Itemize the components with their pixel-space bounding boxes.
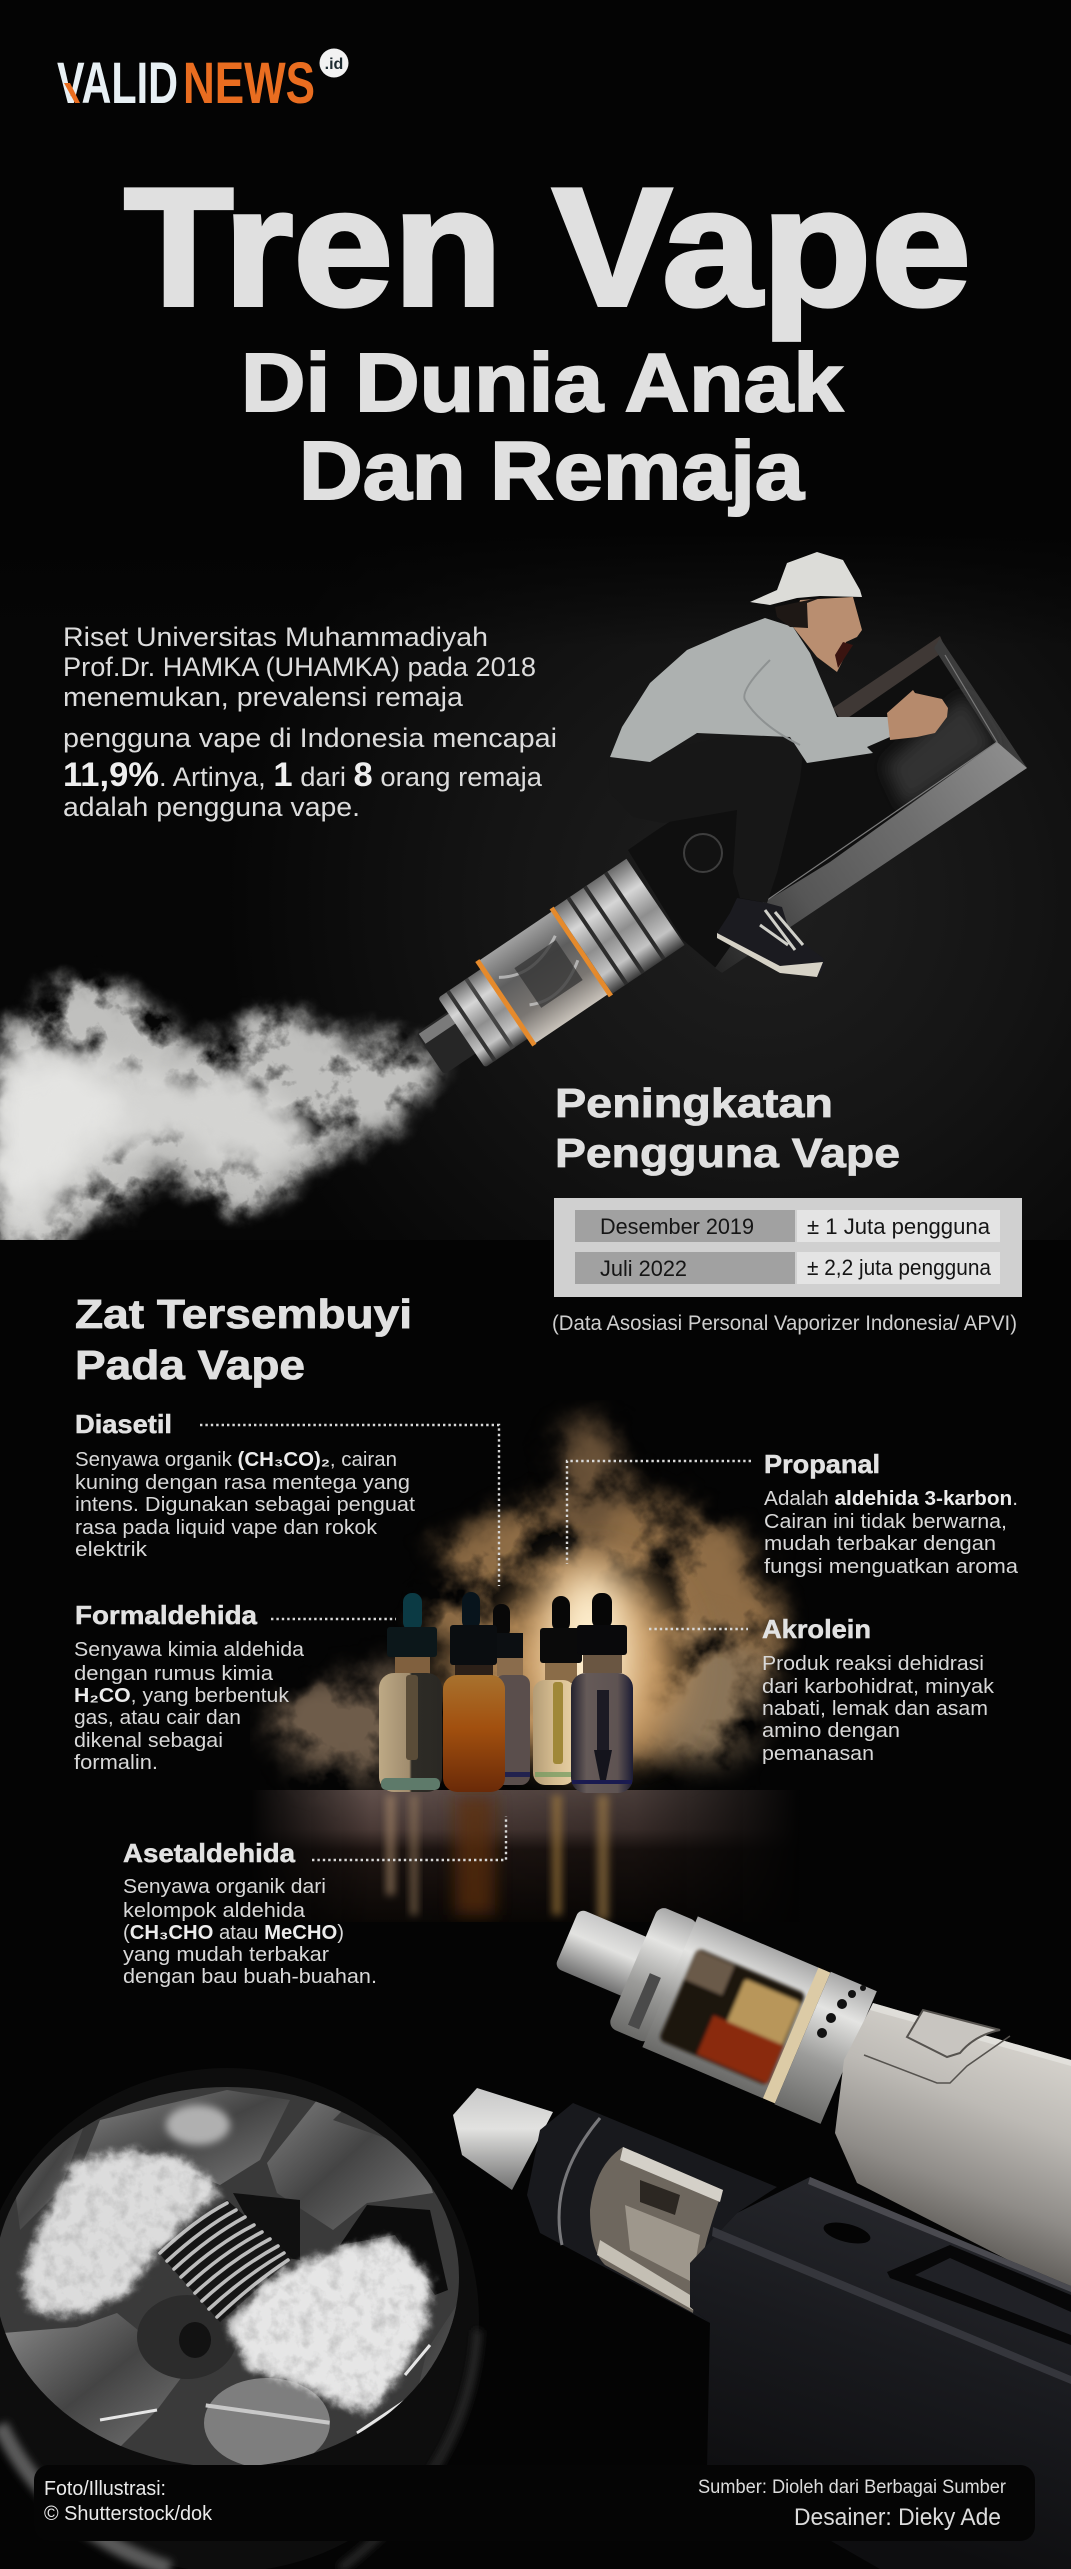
base button [684,834,722,872]
callout: Diasetil: rasa pada liquid vape dan rokok [75,1516,378,1539]
panel outline [760,655,997,905]
mod highlight band [712,2227,1071,2384]
section heading: zat tersembuyi: Zat Tersembuyi [75,1291,412,1337]
silver tank assembly [539,1872,877,2124]
pants [608,737,803,903]
logo id badge [320,48,348,78]
callout: Asetaldehida: (CH₃CHO atau MeCHO) [123,1921,344,1944]
photo: silver vape [539,1872,1071,2292]
black mod body [690,2177,1071,2569]
callout: Formaldehida [74,1600,396,1774]
glow and smoke [270,1430,775,1785]
outer ring [0,2068,479,2569]
source and designer: Sumber: Dioleh dari Berbagai Sumber [698,2477,1007,2498]
photo: black vape [453,2088,1071,2569]
deck [0,2087,459,2467]
photo: rider background glow [0,530,1071,1240]
callout: Asetaldehida: dengan bau buah-buahan. [123,1965,377,1988]
callout: Asetaldehida: Asetaldehida [123,1838,296,1868]
callout: Formaldehida: dengan rumus kimia [74,1662,274,1685]
title line 2: Di Dunia Anak [241,336,844,429]
callout: Asetaldehida: kelompok aldehida [123,1899,306,1922]
silver lower band [715,742,1027,973]
callout: Formaldehida: gas, atau cair dan [74,1706,241,1729]
heading: peningkatan [555,1080,900,1176]
mod hole [822,2218,872,2248]
mod slot [887,2245,1071,2345]
callout: Asetaldehida [123,1816,506,1988]
logo id badge: .id [325,56,343,73]
photo credit: © Shutterstock/dok [44,2503,213,2525]
callout: Propanal: mudah terbakar dengan [764,1532,996,1555]
head [775,597,862,672]
callout: Diasetil: kuning dengan rasa mentega yang [75,1471,410,1494]
row: Desember 2019: ± 1 Juta pengguna [807,1214,991,1239]
hand [887,690,948,740]
body seam [864,2036,1010,2083]
smoke cloud [0,983,443,1300]
silver body [835,2003,1071,2292]
photo credit: Foto/Illustrasi: [44,2478,166,2500]
vape device rocket [400,636,1027,1098]
logo wordmark [57,51,315,116]
callout: Diasetil: elektrik [75,1538,148,1561]
panel sheen [885,695,995,808]
section heading: zat tersembuyi: Pada Vape [75,1342,305,1388]
callout: Propanal: Cairan ini tidak berwarna, [764,1510,1007,1533]
air holes [817,1985,866,2038]
intro text [63,622,557,822]
table source note: (Data Asosiasi Personal Vaporizer Indonesia/ APVI) [552,1312,1017,1335]
footer bar [34,2465,1035,2541]
right edge [934,638,1027,775]
callout: Akrolein: amino dengan [762,1719,900,1742]
intro text: pengguna vape di Indonesia mencapai [63,723,557,753]
top edge sheen [833,636,946,722]
callout: Akrolein [649,1614,995,1765]
black tip [453,2088,553,2190]
callout: Asetaldehida: yang mudah terbakar [123,1943,329,1966]
section heading: zat tersembuyi [75,1291,412,1388]
bottle 2 [443,1592,505,1792]
title line 1: Tren Vape [124,153,971,341]
row: Desember 2019 [575,1210,1000,1242]
callout: Propanal: fungsi menguatkan aroma [764,1555,1019,1578]
intro text: menemukan, prevalensi remaja [63,682,464,712]
logo [57,48,348,116]
callout: Formaldehida: dikenal sebagai [74,1729,223,1752]
shoe [717,898,825,977]
callout: Propanal: Propanal [764,1449,880,1479]
floor reflection [262,1790,778,1922]
row: Juli 2022: Juli 2022 [600,1256,687,1281]
intro text: Prof.Dr. HAMKA (UHAMKA) pada 2018 [63,652,536,682]
callout: Akrolein: Akrolein [762,1614,871,1644]
title line 3: Dan Remaja [299,424,805,517]
tank [400,858,685,1098]
logo chevron [64,83,80,103]
bottle 1 [379,1593,442,1792]
callout: Propanal: Adalah aldehida 3-karbon. [764,1487,1018,1510]
coil [156,2200,292,2322]
callout: Akrolein: Produk reaksi dehidrasi [762,1652,984,1675]
bright metal edges [100,2344,431,2434]
photo credit [44,2478,213,2525]
intro text: adalah pengguna vape. [63,792,360,822]
photo: coil deck [0,2068,479,2569]
device body [628,638,1027,973]
logo wordmark: VALID [57,51,178,116]
row: Desember 2019: Desember 2019 [600,1214,754,1239]
source and designer [698,2477,1007,2531]
callout: Propanal [567,1449,1019,1578]
callout: Diasetil: Senyawa organik (CH₃CO)₂, cairan [75,1448,397,1471]
heading: peningkatan: Pengguna Vape [555,1130,900,1176]
callout: Akrolein: pemanasan [762,1742,874,1765]
callout: Diasetil: Diasetil [75,1409,172,1439]
title [124,153,971,517]
table: user growth [554,1198,1022,1297]
logo wordmark: NEWS [183,51,315,116]
glass window [590,2147,723,2313]
source and designer: Desainer: Dieky Ade [794,2504,1001,2531]
callout: Asetaldehida: Senyawa organik dari [123,1875,326,1898]
callout: Formaldehida: Senyawa kimia aldehida [74,1638,305,1661]
cotton [23,2150,430,2413]
bottle 5 [571,1593,633,1793]
callout: Diasetil [75,1409,499,1586]
metal wedges [3,2080,460,2470]
callout: Formaldehida: formalin. [74,1751,158,1774]
photo: liquid bottles with glowing smoke [254,1404,798,1922]
sweatshirt [610,618,890,763]
bottle 4 [533,1596,582,1785]
black body [527,2103,777,2323]
callout: Akrolein: dari karbohidrat, minyak [762,1675,995,1698]
fire button [907,2010,1000,2057]
callout: Formaldehida: Formaldehida [75,1600,258,1630]
callout: Formaldehida: H₂CO, yang berbentuk [74,1684,290,1707]
cap [750,552,862,605]
row: Juli 2022: ± 2,2 juta pengguna [807,1255,992,1280]
intro text: 11,9%. Artinya, 1 dari 8 orang remaja [63,756,543,794]
dark cavities [233,2193,300,2260]
intro text: Riset Universitas Muhammadiyah [63,622,488,652]
heading: peningkatan: Peningkatan [555,1080,833,1126]
callout: Akrolein: nabati, lemak dan asam [762,1697,988,1720]
row: Juli 2022 [575,1252,1000,1284]
bottle 3 [493,1604,530,1785]
rider figure [608,552,948,977]
callout: Diasetil: intens. Digunakan sebagai penguat [75,1493,415,1516]
